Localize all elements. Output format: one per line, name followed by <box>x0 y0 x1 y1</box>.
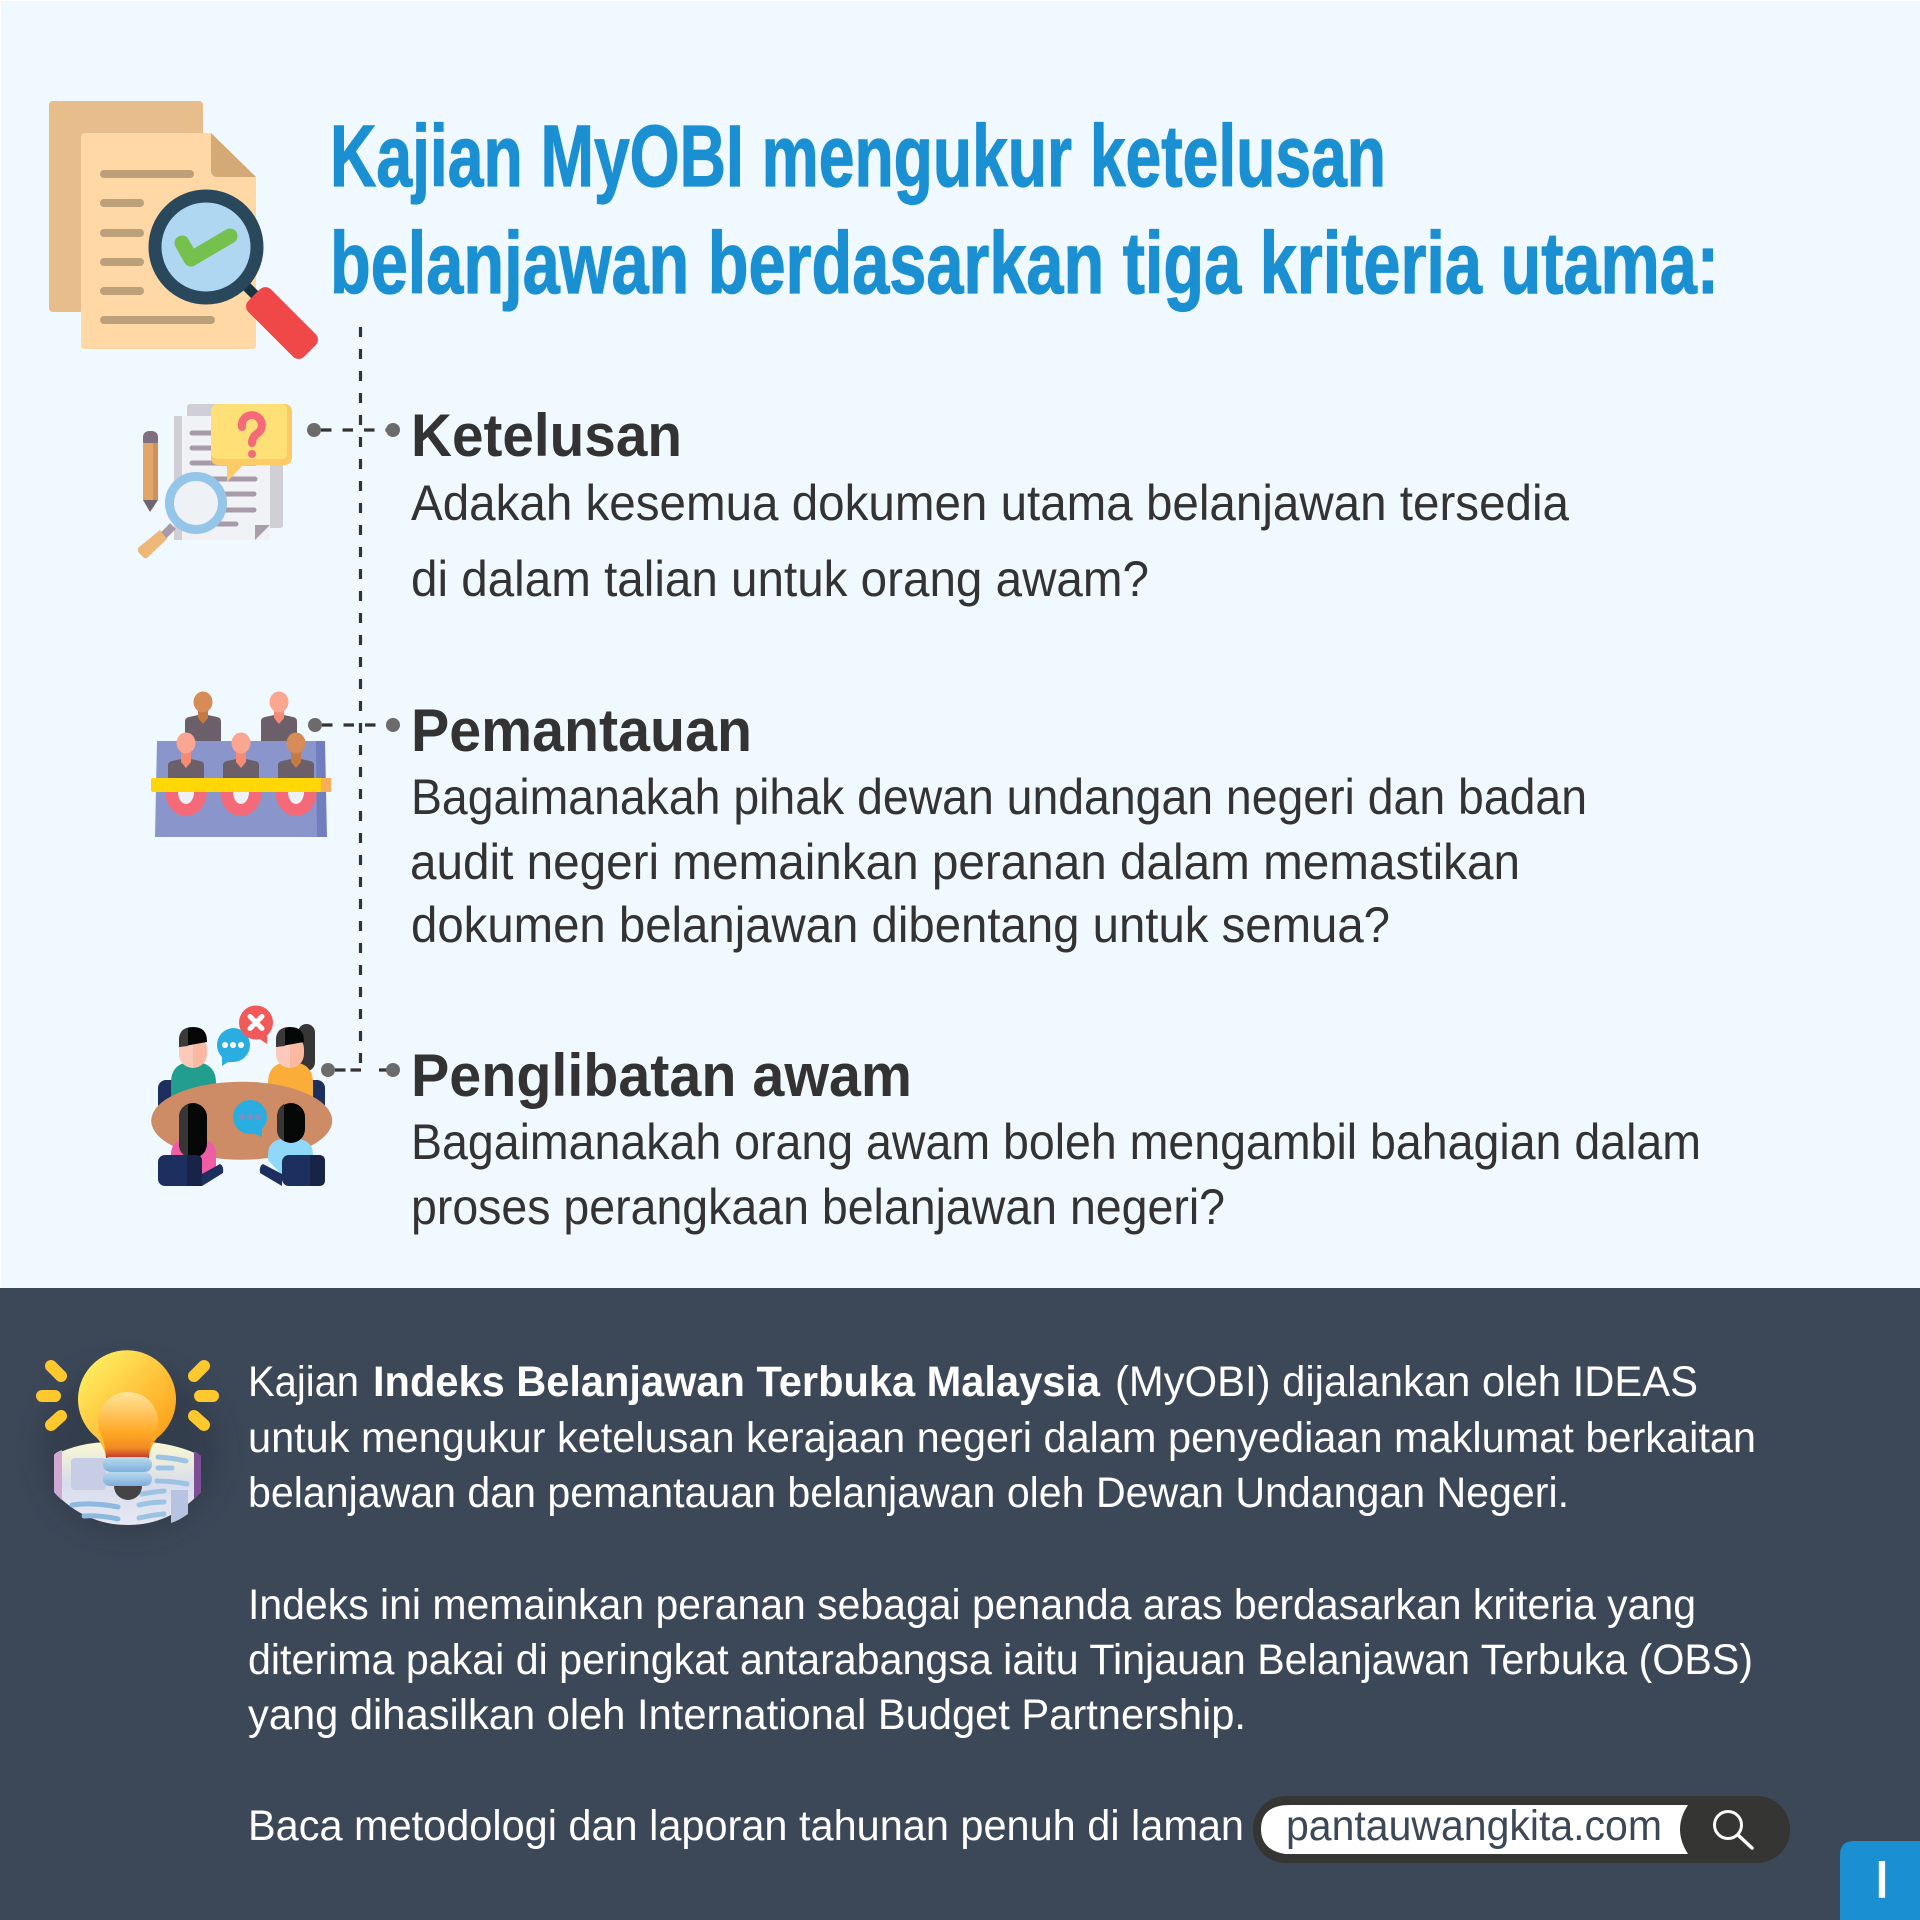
title: Kajian MyOBI mengukur ketelusan <box>330 108 1386 205</box>
criterion: Penglibatan awam: Bagaimanakah orang awam boleh mengambil bahagian dalam <box>411 1114 1701 1170</box>
timeline connector <box>307 327 400 1077</box>
text block: about MyOBI: Indeks Belanjawan Terbuka Malaysia <box>373 1358 1101 1406</box>
icon: legislative assembly members at desk <box>151 692 331 837</box>
text block: about the index <box>248 1581 1753 1739</box>
text block: about MyOBI: Kajian <box>248 1358 359 1406</box>
icon: documents with magnifier and check <box>49 101 321 362</box>
criterion: Ketelusan: di dalam talian untuk orang awam? <box>411 551 1149 607</box>
criterion: Ketelusan: Adakah kesemua dokumen utama belanjawan tersedia <box>411 475 1569 531</box>
search bar: pantauwangkita.com <box>1253 1796 1790 1863</box>
criterion: Pemantauan <box>410 697 1587 953</box>
title <box>330 108 1719 312</box>
icon: light bulb over open book <box>40 1350 220 1535</box>
text block: about the index: Indeks ini memainkan peranan sebagai penanda aras berdasarkan kriteria yang <box>248 1581 1696 1629</box>
text block: about MyOBI: (MyOBI) dijalankan oleh IDEAS <box>1115 1358 1698 1406</box>
criterion: Ketelusan <box>411 402 1569 607</box>
text block: about MyOBI: belanjawan dan pemantauan belanjawan oleh Dewan Undangan Negeri. <box>248 1469 1569 1517</box>
text block: about the index: yang dihasilkan oleh International Budget Partnership. <box>248 1691 1246 1739</box>
criterion: Penglibatan awam: proses perangkaan belanjawan negeri? <box>411 1179 1225 1235</box>
criterion: Penglibatan awam <box>411 1042 1701 1235</box>
text block: about the index: diterima pakai di peringkat antarabangsa iaitu Tinjauan Belanjawan Terbuka (OBS) <box>248 1636 1753 1684</box>
criterion: Pemantauan: Pemantauan <box>411 697 752 764</box>
panel: light background <box>1 1 1920 1289</box>
criterion: Pemantauan: audit negeri memainkan peranan dalam memastikan <box>410 834 1520 890</box>
icon: public discussion around table <box>151 1006 332 1186</box>
criterion: Pemantauan: Bagaimanakah pihak dewan undangan negeri dan badan <box>411 769 1587 825</box>
page number tab <box>1840 1841 1920 1920</box>
search bar: pantauwangkita.com: pantauwangkita.com <box>1286 1802 1662 1850</box>
text block: about MyOBI <box>248 1358 1756 1517</box>
page number tab: I <box>1875 1851 1889 1908</box>
criterion: Ketelusan: Ketelusan <box>411 402 682 469</box>
criterion: Penglibatan awam: Penglibatan awam <box>411 1042 912 1109</box>
text block: about MyOBI: untuk mengukur ketelusan kerajaan negeri dalam penyediaan maklumat berkaitan <box>248 1414 1756 1462</box>
text block: read more: Baca metodologi dan laporan tahunan penuh di laman <box>248 1802 1244 1850</box>
panel: dark footer background <box>0 1288 1920 1920</box>
icon: document with question bubble <box>138 404 292 558</box>
criterion: Pemantauan: dokumen belanjawan dibentang untuk semua? <box>411 897 1390 953</box>
